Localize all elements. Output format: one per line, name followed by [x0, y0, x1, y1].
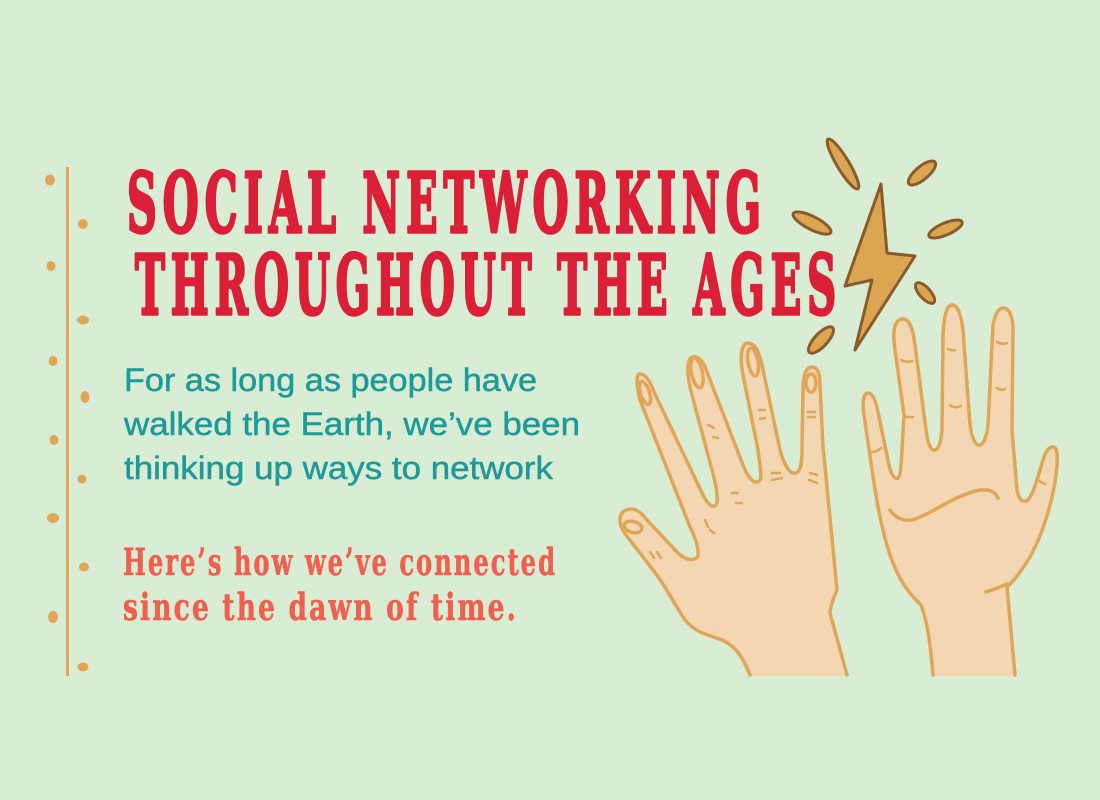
intro paragraph [123, 362, 580, 486]
title [127, 156, 842, 334]
subheading [123, 540, 557, 629]
intro paragraph: walked the Earth, we’ve been [123, 406, 580, 442]
notebook margin line with dots [45, 167, 90, 676]
icon: right hand (palm) [863, 305, 1057, 676]
icon: left hand (back of hand) [620, 343, 847, 676]
icon: lightning bolt with sparks [790, 136, 964, 357]
subheading: Here’s how we’ve connected [123, 540, 557, 584]
intro paragraph: For as long as people have [124, 362, 537, 398]
subheading: since the dawn of time. [123, 585, 518, 629]
intro paragraph: thinking up ways to network [124, 450, 554, 486]
